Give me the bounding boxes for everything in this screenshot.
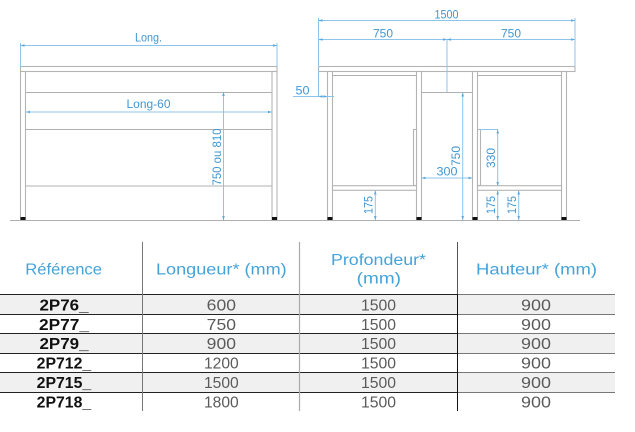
row 2P715_: 900 [521, 375, 551, 392]
lower shelves, side view [332, 186, 562, 190]
row 2P712_: 1200 [204, 356, 239, 372]
row 2P77_: 1500 [361, 317, 396, 334]
row 2P718_ [37, 394, 551, 412]
table top, side view [318, 66, 575, 72]
table grid [0, 242, 615, 411]
dimension: 175 left: 175 [364, 196, 376, 214]
dimension: 750 right: 750 [501, 28, 521, 40]
row 2P712_ [37, 356, 551, 372]
row 2P715_ [37, 375, 551, 392]
table legs, front view [20, 72, 277, 220]
row 2P79_: 900 [207, 336, 236, 353]
row 2P715_: 1500 [204, 375, 239, 392]
dimension: 750 ou 810: 750 ou 810 [212, 128, 224, 186]
row 2P718_: 2P718_ [37, 394, 92, 412]
table header: Longueur* (mm) [156, 261, 287, 278]
row 2P76_: 2P76_ [40, 298, 89, 314]
upright brackets, side view [414, 130, 480, 186]
dimension: 750 vertical [451, 92, 464, 220]
row 2P79_: 1500 [361, 336, 396, 353]
dimension: 1500: 1500 [434, 10, 458, 22]
row 2P76_: 1500 [361, 298, 396, 314]
row 2P76_: 600 [207, 298, 236, 314]
table top, front view [20, 66, 277, 72]
front view drawing [10, 32, 300, 220]
row 2P76_ [40, 298, 551, 314]
row 2P715_: 1500 [361, 375, 396, 392]
alternating row shading [0, 295, 615, 392]
dimension: Long-60: Long-60 [126, 99, 170, 111]
side view drawing [293, 10, 580, 220]
table header: Profondeur* [331, 252, 426, 269]
dimension: 750 left: 750 [373, 28, 393, 40]
row 2P79_ [40, 336, 551, 353]
dimension: 300 [422, 166, 472, 179]
row 2P76_: 900 [521, 298, 551, 314]
row 2P718_: 1500 [361, 394, 396, 412]
row 2P77_ [39, 317, 551, 334]
row 2P715_: 2P715_ [37, 375, 92, 392]
row 2P79_: 2P79_ [40, 336, 89, 353]
dimension: 175 centre [486, 190, 499, 220]
row 2P718_: 1800 [204, 394, 239, 412]
dimension: 300: 300 [436, 166, 458, 178]
legs, side view [328, 72, 566, 220]
row 2P712_: 2P712_ [37, 356, 92, 372]
dimension: 175 right [507, 190, 520, 220]
dimensions table [0, 242, 615, 412]
row 2P718_: 900 [521, 394, 551, 412]
dimension: 750 ou 810 [212, 92, 225, 220]
dimension: Long.: Long. [135, 32, 162, 44]
dimension: 330 [480, 130, 499, 186]
row 2P79_: 900 [521, 336, 551, 353]
row 2P712_: 1500 [361, 356, 396, 372]
upper rails, side view [332, 76, 562, 92]
row 2P77_: 750 [207, 317, 236, 334]
dimension: 750 right [447, 28, 575, 92]
rails, front view [26, 92, 272, 186]
dimension: 175 centre: 175 [486, 196, 498, 214]
feet, front view [20, 217, 277, 220]
dimension: 175 left [364, 190, 377, 220]
table header: (mm) [357, 270, 401, 288]
dimension: 50: 50 [296, 86, 310, 98]
dimension: 330: 330 [486, 148, 498, 168]
dimension: 750 left [318, 28, 447, 41]
table header: Référence [25, 261, 102, 278]
row 2P77_: 900 [521, 317, 551, 334]
row 2P712_: 900 [521, 356, 551, 372]
dimension: 50 [293, 71, 334, 98]
feet, side view [328, 217, 566, 220]
dimension: 750 vertical: 750 [451, 146, 463, 166]
dimension: 175 right: 175 [507, 196, 519, 214]
row 2P77_: 2P77_ [39, 317, 89, 334]
ground line, front view [10, 220, 300, 222]
table header [25, 252, 597, 288]
ground line, side view [300, 220, 580, 222]
table header: Hauteur* (mm) [476, 261, 597, 278]
